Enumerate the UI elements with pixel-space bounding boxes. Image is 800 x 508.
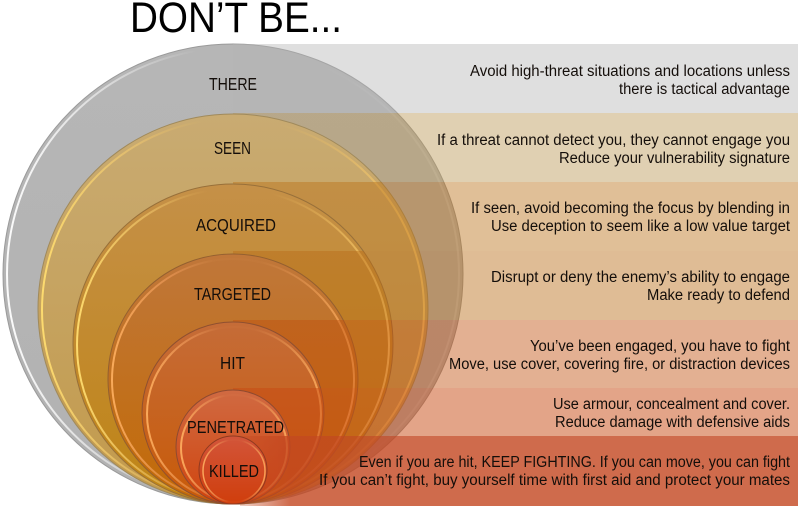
band: seen [233, 113, 798, 182]
circle: acquired [73, 184, 393, 504]
label: targeted: TARGETED [194, 284, 271, 304]
text block: there [470, 63, 790, 98]
text block: hit: You’ve been engaged, you have to fight [530, 338, 791, 355]
band: killed [240, 436, 798, 506]
text block: seen: If a threat cannot detect you, they cannot engage you [437, 132, 790, 149]
text block: killed: If you can’t fight, buy yourself time with first aid and protect your mates [319, 472, 790, 489]
text block: acquired [471, 200, 791, 235]
band: there [233, 44, 798, 113]
text block: acquired: Use deception to seem like a low value target [491, 218, 791, 235]
text block: targeted: Make ready to defend [647, 287, 790, 304]
label: seen: SEEN [214, 138, 251, 158]
circle: hit [142, 322, 324, 504]
text block: penetrated: Use armour, concealment and cover. [553, 396, 790, 413]
band: penetrated [233, 388, 798, 436]
text block: targeted [491, 269, 790, 304]
text block: seen [437, 132, 790, 167]
band: targeted [233, 251, 798, 320]
text block: killed [319, 454, 791, 489]
text block: seen: Reduce your vulnerability signature [559, 150, 790, 167]
band: hit [233, 320, 798, 388]
text block: hit [449, 338, 791, 373]
circle: there [3, 44, 463, 504]
label: killed: KILLED [209, 461, 259, 481]
band: acquired [233, 182, 798, 251]
circle: seen [38, 114, 428, 504]
text block: there: Avoid high-threat situations and locations unless [470, 63, 790, 80]
text block: penetrated: Reduce damage with defensive aids [555, 414, 790, 431]
label: penetrated: PENETRATED [187, 417, 284, 437]
text block: targeted: Disrupt or deny the enemy’s ability to engage [491, 269, 790, 286]
circle: targeted [108, 254, 358, 504]
text block: hit: Move, use cover, covering fire, or distraction devices [449, 356, 790, 373]
label: hit: HIT [220, 353, 245, 373]
circle: penetrated [176, 390, 290, 504]
label: there: THERE [209, 74, 257, 94]
text block: there: there is tactical advantage [619, 81, 790, 98]
label: acquired: ACQUIRED [196, 215, 276, 235]
text block: penetrated [553, 396, 790, 431]
circle: killed [199, 436, 267, 504]
text block: acquired: If seen, avoid becoming the focus by blending in [471, 200, 790, 217]
